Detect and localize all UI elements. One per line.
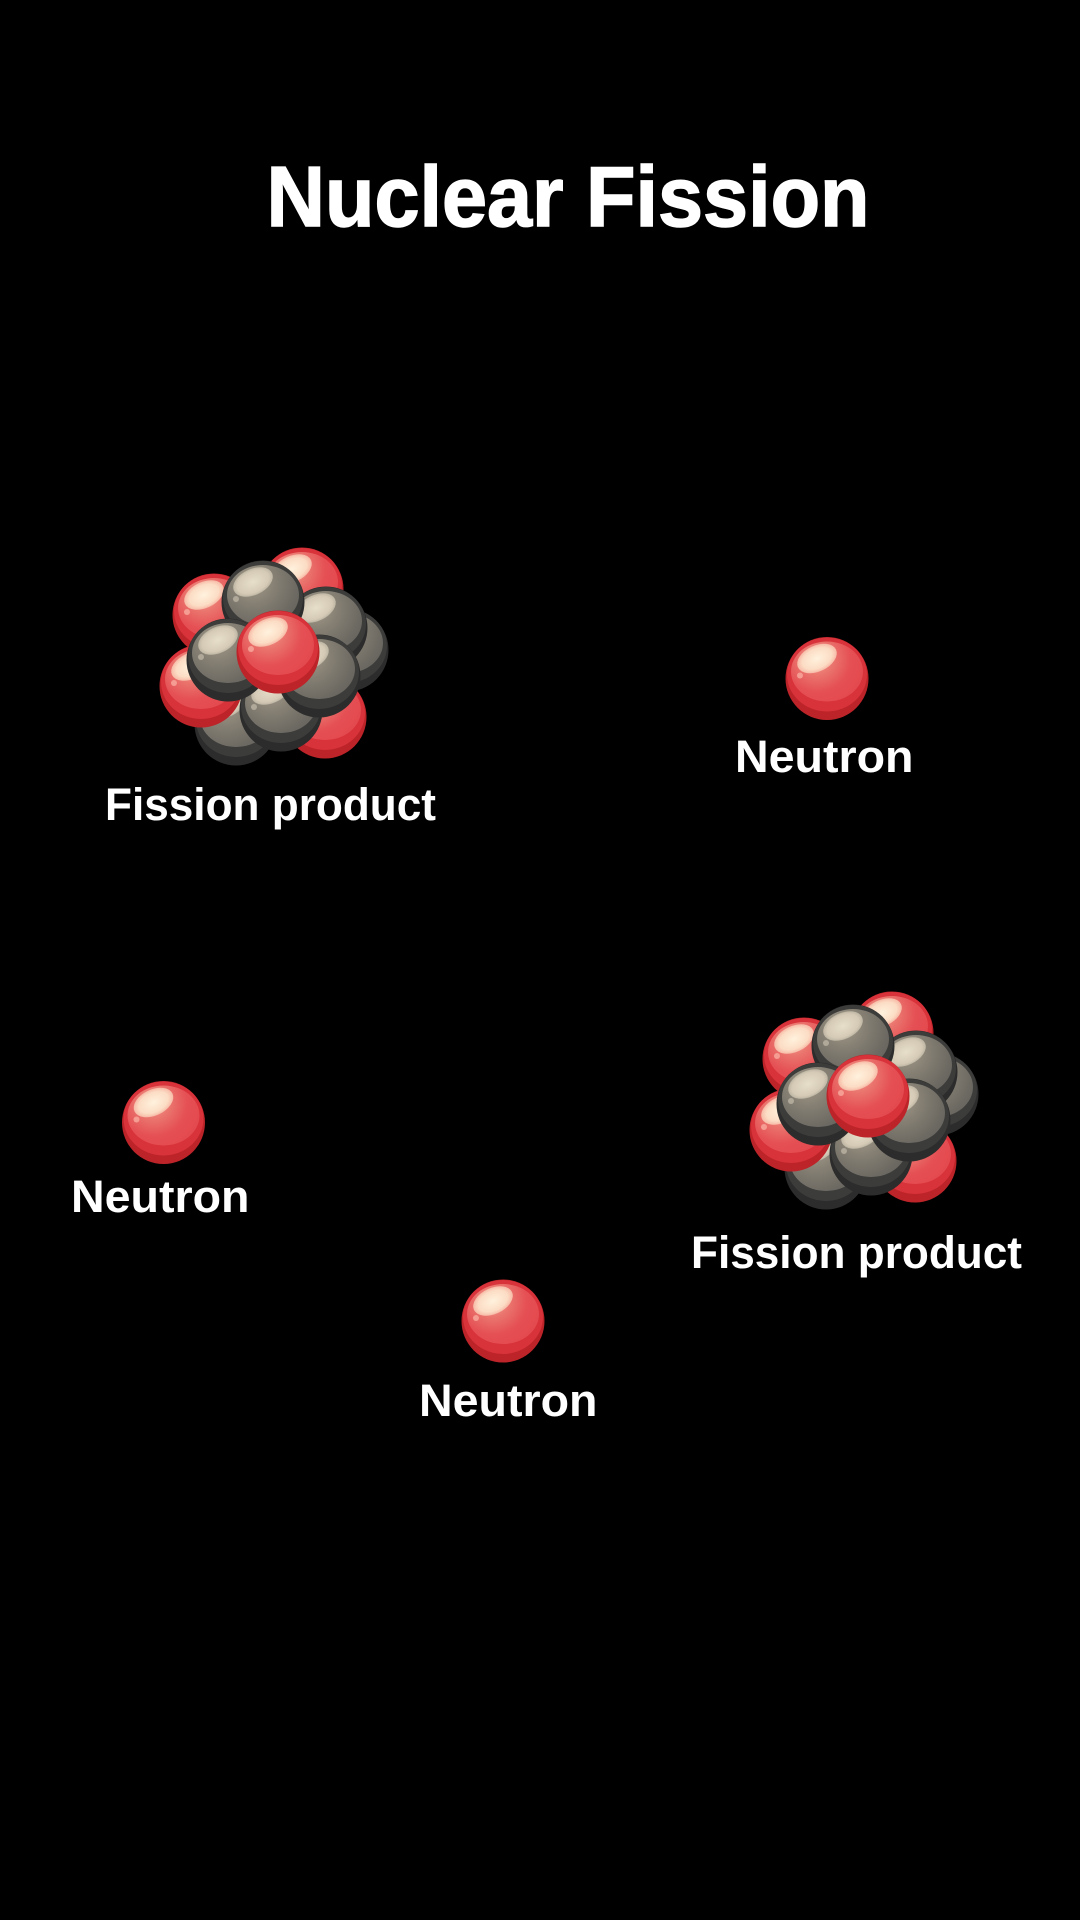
label: neutron, center: Neutron (419, 1375, 598, 1426)
label: fission product, top left: Fission product (105, 779, 436, 830)
label: neutron, left: Neutron (71, 1171, 250, 1222)
label: fission product, lower right: Fission product (691, 1227, 1022, 1278)
neutron: center (462, 1280, 544, 1362)
neutron: left (122, 1081, 205, 1164)
label: neutron, top right: Neutron (735, 731, 914, 782)
fission product cluster: lower right (750, 992, 978, 1210)
neutron: top right (786, 637, 868, 720)
title: Nuclear Fission (266, 150, 870, 245)
fission product cluster: top left (160, 548, 388, 766)
